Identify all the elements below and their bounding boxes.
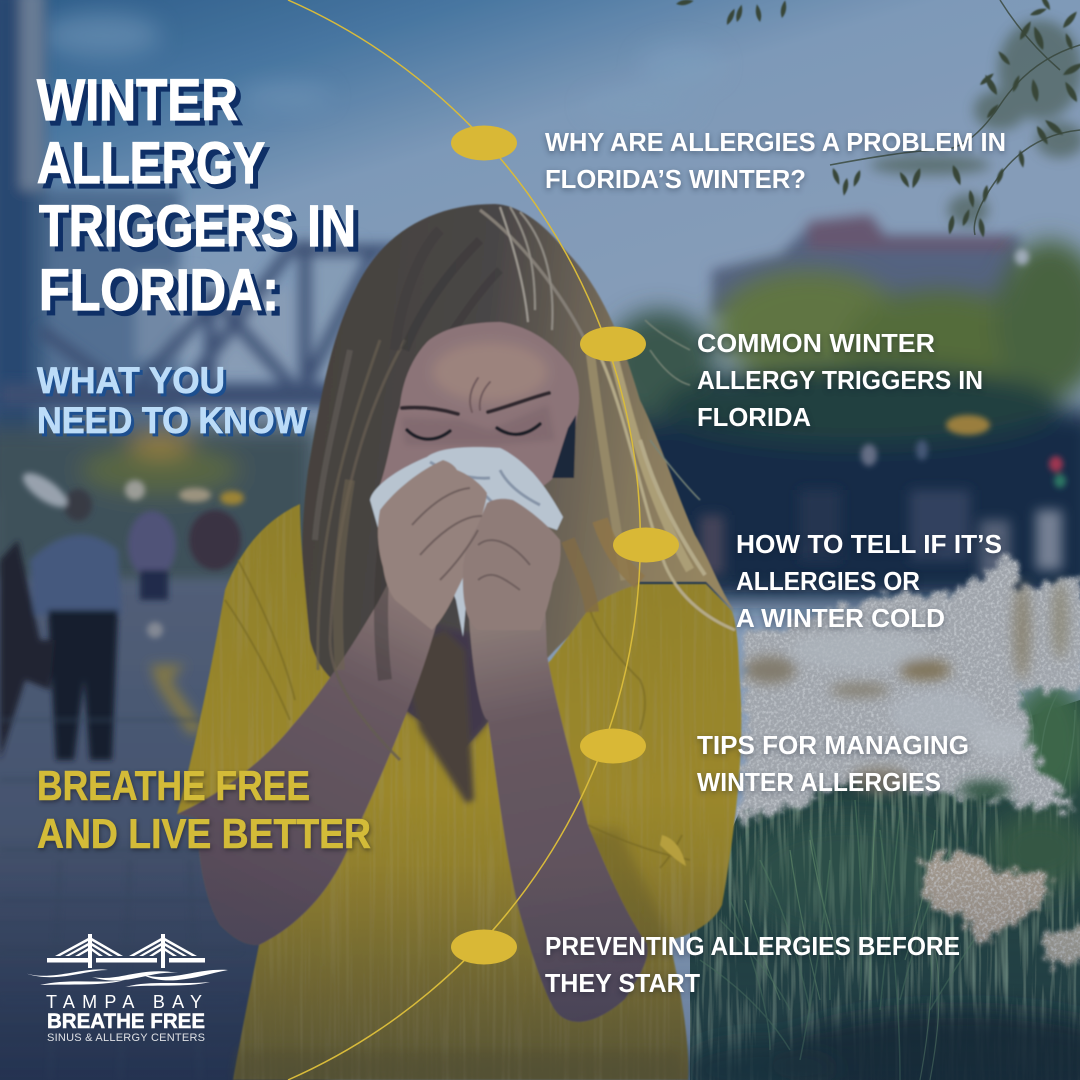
walking pedestrians [0, 467, 244, 760]
topic 2 text: COMMON WINTER [697, 328, 935, 358]
light patches behind bridge [135, 240, 360, 480]
topic 1 text: WHY ARE ALLERGIES A PROBLEM IN [545, 127, 1006, 157]
topic 1 [451, 126, 1006, 194]
bokeh highlights [861, 249, 1066, 488]
left arm [177, 570, 440, 945]
hands [378, 460, 561, 630]
subtitle [37, 360, 307, 441]
marker 3 [613, 528, 679, 562]
topic 5 text: THEY START [545, 968, 700, 998]
title: WINTER [37, 68, 238, 133]
topic 4 text: TIPS FOR MANAGING [697, 730, 969, 760]
topic 3 text: HOW TO TELL IF IT’S [736, 529, 1002, 559]
street pavers texture [0, 720, 240, 1080]
tissue folds [430, 462, 540, 510]
foreground ornamental grass [680, 553, 1080, 1080]
pampas plumes [742, 553, 1080, 965]
timeline arc [288, 0, 640, 1080]
logo text: SINUS & ALLERGY CENTERS [47, 1032, 205, 1044]
left hand [378, 460, 487, 630]
tagline: BREATHE FREE [37, 762, 310, 809]
eye socket shade [402, 405, 555, 445]
woman sneezing into tissue [177, 204, 741, 1080]
eyebrows and eyes [402, 378, 549, 439]
dark grass base with blade texture [690, 700, 1080, 1080]
topic 1 text [545, 127, 1006, 194]
icon: cable-stayed bridge with waves [25, 934, 228, 987]
topic 3 text: ALLERGIES OR [736, 566, 920, 596]
logo text: BREATHE FREE [47, 1009, 205, 1033]
title: ALLERGY [37, 131, 265, 196]
topic 4 text [697, 730, 969, 797]
left trees and crowd band [0, 425, 320, 595]
topic 3 text: A WINTER COLD [736, 603, 945, 633]
pampas highlights and tan patches [744, 580, 1068, 799]
marker 4 [580, 728, 646, 764]
ground pavement [0, 580, 330, 1080]
topic 4 text: WINTER ALLERGIES [697, 767, 941, 797]
sleeve highlight fold [660, 835, 686, 866]
crowd lights and bokeh [700, 490, 1062, 580]
hair strands on front [315, 207, 735, 760]
tagline [37, 762, 371, 857]
title [37, 68, 356, 323]
foreground branches top right [830, 0, 1080, 235]
topic 4 [580, 728, 969, 797]
title: FLORIDA: [39, 258, 279, 323]
title: TRIGGERS IN [39, 194, 356, 259]
marker 5 [451, 930, 517, 964]
topic 3 [613, 528, 1002, 633]
topic 2 [580, 326, 983, 432]
topic 2 text [697, 328, 983, 432]
distant building right [712, 215, 1020, 320]
forehead highlight [432, 342, 548, 402]
tissue [370, 447, 563, 637]
tagline: AND LIVE BETTER [37, 810, 371, 857]
subtitle: NEED TO KNOW [37, 400, 307, 441]
finger lines [412, 488, 530, 590]
logo: Tampa Bay Breathe Free [25, 934, 228, 1044]
right tree mass [590, 240, 1080, 600]
left building [0, 0, 180, 500]
hair back [302, 204, 735, 803]
topic 5 text: PREVENTING ALLERGIES BEFORE [545, 931, 960, 961]
face [378, 322, 579, 504]
dark shadow behind jaw [552, 415, 576, 478]
logo text [46, 992, 205, 1044]
topic 2 text: ALLERGY TRIGGERS IN [697, 365, 983, 395]
foliage leaves top right [676, 0, 1080, 238]
marker 2 [580, 326, 646, 362]
clouds [40, 13, 720, 115]
topic 2 text: FLORIDA [697, 402, 811, 432]
chest between arms [395, 626, 488, 803]
soft foliage mass top right [870, 20, 1080, 226]
grass shading [680, 680, 1080, 1080]
topic 1 text: FLORIDA’S WINTER? [545, 164, 806, 194]
right hand [463, 499, 561, 630]
topic 5 text [545, 931, 960, 998]
right arm [468, 600, 648, 1022]
topic 3 text [736, 529, 1002, 633]
shirt shadows [236, 830, 680, 1080]
shirt body [177, 504, 741, 1080]
topic 5 [451, 930, 960, 998]
grass blades [700, 690, 1075, 1080]
yellow road marking [150, 665, 205, 735]
subtitle: WHAT YOU [37, 360, 225, 401]
blurred bridge [0, 240, 400, 395]
logo text: TAMPA BAY [46, 992, 202, 1012]
marker 1 [451, 126, 517, 160]
shirt creases [225, 560, 690, 868]
